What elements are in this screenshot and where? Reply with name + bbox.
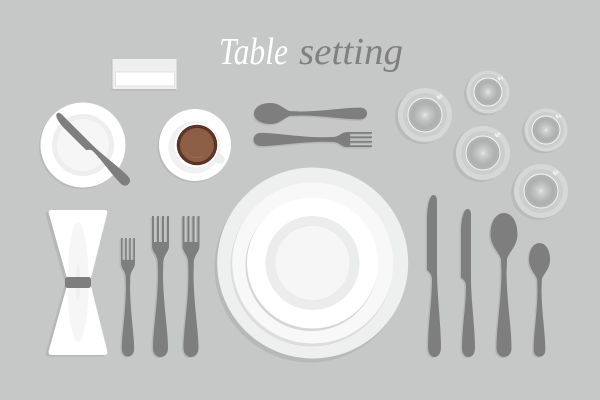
dinner fork — [150, 216, 169, 358]
glass 4 — [453, 126, 510, 182]
dinner knife — [426, 195, 441, 358]
folded napkin — [46, 210, 107, 356]
glass 1 — [395, 88, 452, 144]
title — [219, 31, 403, 73]
dessert spoon — [253, 103, 367, 126]
stacked plates — [214, 168, 408, 362]
napkin ring — [65, 277, 91, 288]
glass 2 — [464, 70, 510, 116]
place card — [112, 59, 176, 90]
glass 5 — [511, 164, 568, 220]
salad fork — [120, 238, 135, 357]
fish knife — [460, 209, 475, 358]
title: setting — [299, 31, 403, 73]
bread plate with knife — [39, 102, 132, 189]
tea spoon — [527, 243, 550, 358]
coffee cup on saucer — [158, 109, 231, 182]
soup spoon — [489, 213, 518, 358]
title: Table — [219, 31, 288, 73]
icon: butter knife — [53, 109, 132, 188]
main fork — [181, 216, 200, 358]
glass 3 — [522, 108, 568, 154]
dessert fork — [253, 132, 372, 148]
